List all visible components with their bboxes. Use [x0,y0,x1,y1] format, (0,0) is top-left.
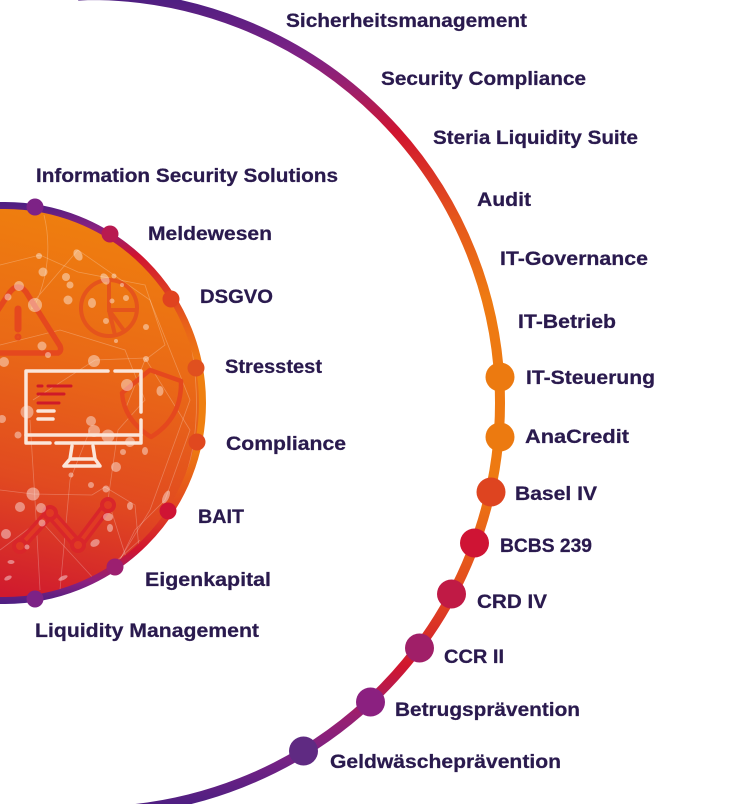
sphere [0,206,202,600]
outer labels: Betrugsprävention [395,700,580,721]
inner labels: Liquidity Management [35,621,260,642]
outer labels: IT-Betrieb [518,312,616,333]
inner labels: Meldewesen [148,224,272,245]
inner labels: Stresstest [225,357,323,378]
icon: pie chart [81,280,137,336]
outer labels: Basel IV [515,484,597,505]
outer labels: Geldwäscheprävention [330,752,561,773]
inner labels: Eigenkapital [145,570,271,591]
inner ring [0,206,202,600]
inner labels: BAIT [198,507,244,528]
inner ring markers [26,198,206,608]
icon: monitor [26,371,141,466]
outer labels: AnaCredit [525,427,630,448]
icon: shield [122,370,181,437]
outer labels: CCR II [444,647,504,668]
network nodes [0,248,172,582]
outer labels: BCBS 239 [500,536,592,557]
inner labels: DSGVO [200,287,273,308]
outer arc markers [289,362,514,766]
outer arc [78,0,500,804]
outer labels: IT-Governance [500,249,648,270]
outer labels [286,11,655,773]
icon: warning triangle [0,287,61,353]
network lines [0,215,196,600]
outer labels: Security Compliance [381,69,586,90]
inner labels: Compliance [226,434,346,455]
outer labels: CRD IV [477,592,547,613]
icon: line chart [14,499,114,552]
inner labels: Information Security Solutions [36,166,338,187]
outer labels: Audit [477,190,532,211]
inner labels [35,166,346,642]
outer labels: IT-Steuerung [526,368,655,389]
sphere fill [0,206,202,600]
outer labels: Steria Liquidity Suite [433,128,638,149]
outer labels: Sicherheitsmanagement [286,11,528,32]
